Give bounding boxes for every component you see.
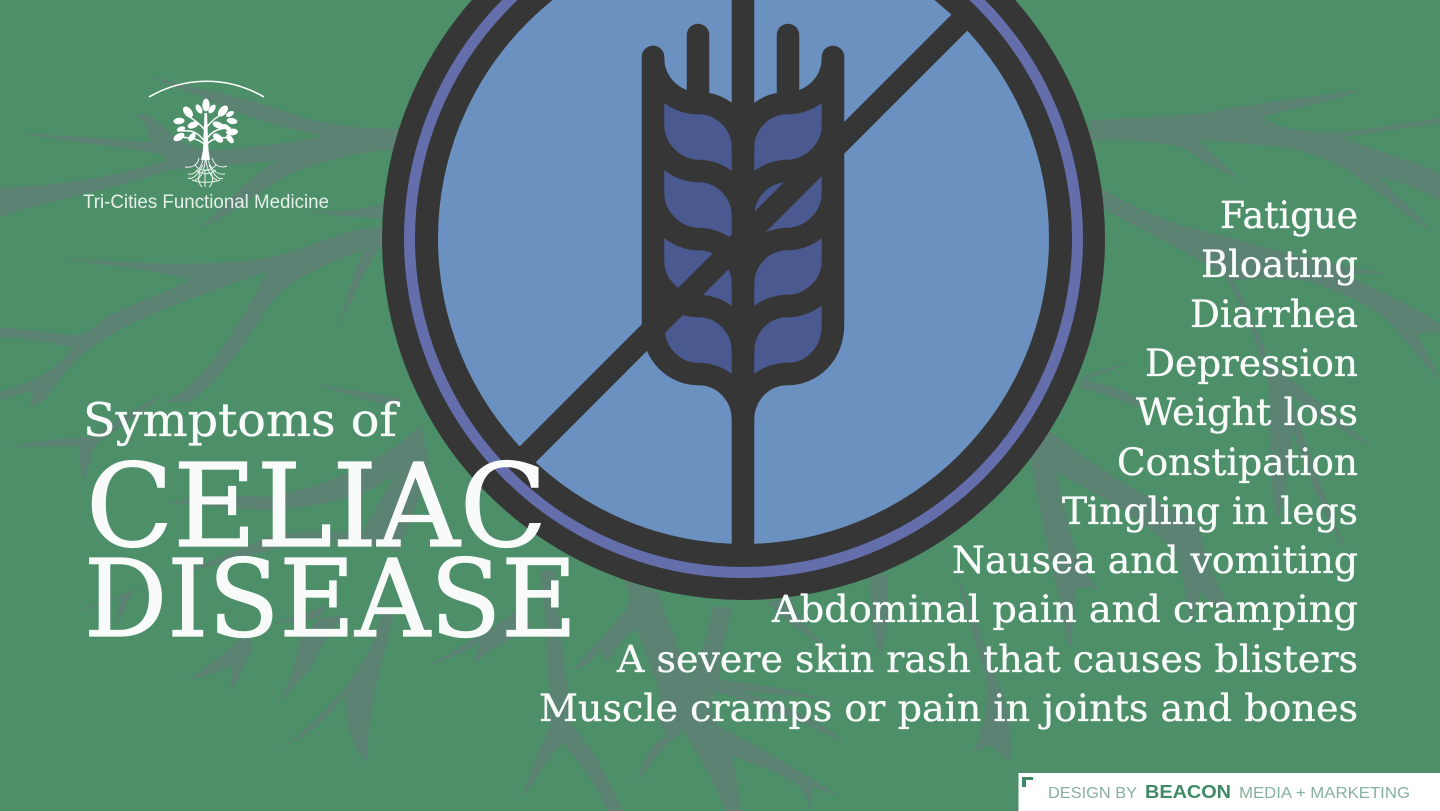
symptom: Diarrhea: Diarrhea — [1190, 293, 1358, 336]
sign purple ring — [410, 0, 1078, 572]
logo: Tri-Cities Functional Medicine — [83, 81, 329, 213]
heading: DISEASE: DISEASE — [84, 538, 577, 662]
logo name: Tri-Cities Functional Medicine — [83, 192, 329, 213]
icon: tree — [172, 99, 238, 160]
footer text: beacon: BEACON — [1145, 782, 1231, 802]
symptom: Fatigue: Fatigue — [1220, 194, 1358, 237]
heading: Symptoms of: Symptoms of — [83, 393, 400, 447]
symptom: Constipation: Constipation — [1117, 441, 1358, 484]
footer corner mark — [1022, 777, 1033, 787]
symptom: Tingling in legs: Tingling in legs — [1062, 490, 1358, 533]
footer text: media + marketing: MEDIA + MARKETING — [1239, 785, 1410, 802]
prohibition slash — [522, 17, 965, 460]
sign outer dark ring — [382, 0, 1105, 600]
symptom: A severe skin rash: A severe skin rash that causes blisters — [616, 638, 1358, 681]
symptoms list — [539, 194, 1358, 730]
symptom: Depression: Depression — [1145, 342, 1358, 385]
icon: wheat ear — [653, 0, 833, 560]
footer white bar — [1018, 773, 1440, 811]
footer credit — [1018, 773, 1440, 811]
footer text: design by: DESIGN BY — [1048, 785, 1137, 802]
icon: tree roots — [185, 158, 227, 187]
symptom: Weight loss: Weight loss — [1136, 391, 1358, 434]
symptom: Muscle cramps: Muscle cramps or pain in joints and bones — [539, 687, 1358, 730]
sign blue interior — [438, 0, 1049, 544]
icon: no-gluten prohibition sign — [382, 0, 1105, 600]
heading: CELIAC: CELIAC — [86, 440, 547, 574]
symptom: Bloating: Bloating — [1201, 243, 1358, 286]
symptom: Nausea and vomiting: Nausea and vomiting — [952, 539, 1358, 582]
symptom: Abdominal pain and cramping: Abdominal pain and cramping — [771, 588, 1358, 631]
logo arc — [149, 81, 264, 97]
